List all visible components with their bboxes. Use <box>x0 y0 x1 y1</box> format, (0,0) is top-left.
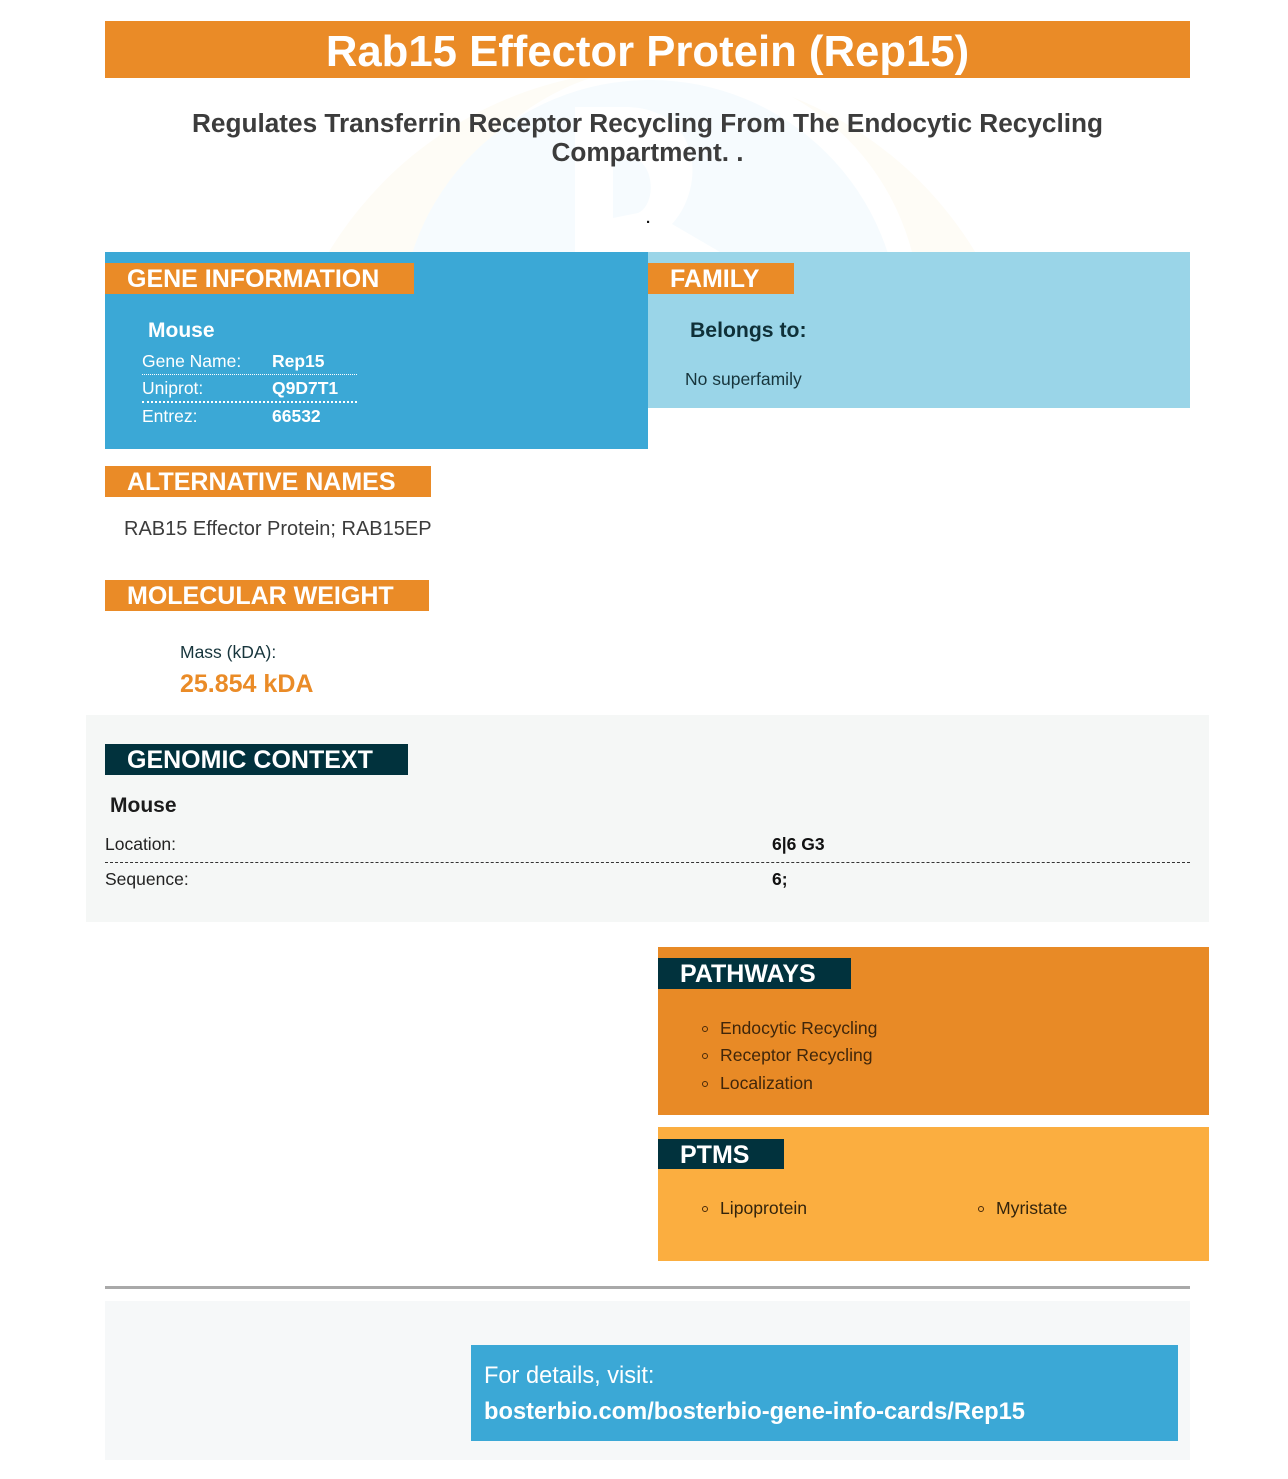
location row: Location: <box>105 834 176 854</box>
ptm item: lipoprotein: Lipoprotein <box>720 1198 807 1218</box>
alternative names text: RAB15 Effector Protein; RAB15EP <box>124 518 432 540</box>
background watermark logo <box>329 78 975 252</box>
heading: molecular weight: MOLECULAR WEIGHT <box>127 582 394 610</box>
pathway item: Endocytic Recycling <box>720 1018 877 1038</box>
mass label: Mass (kDA): <box>180 642 276 662</box>
panel: footer <box>105 1301 1190 1460</box>
sequence row: 6; <box>772 869 788 889</box>
uniprot row: Uniprot: <box>142 378 203 398</box>
sequence row: Sequence: <box>105 869 189 889</box>
pathway item: Localization <box>720 1073 813 1093</box>
panel: pathways <box>658 947 1209 1115</box>
uniprot row <box>142 376 357 403</box>
entrez row <box>142 406 321 426</box>
subtitle <box>192 108 1103 167</box>
location row: 6|6 G3 <box>772 834 825 854</box>
gene name row: Rep15 <box>272 351 325 371</box>
heading: family: FAMILY <box>670 265 759 293</box>
heading: ptms <box>658 1139 784 1169</box>
pathway item: Receptor Recycling <box>720 1045 873 1065</box>
species label: Mouse <box>148 319 215 342</box>
heading: pathways: PATHWAYS <box>680 960 816 988</box>
panel: family <box>648 252 1190 408</box>
subtitle: Regulates Transferrin Receptor Recycling From The Endocytic Recycling <box>192 108 1103 138</box>
belongs to label: Belongs to: <box>690 319 807 342</box>
mass value: 25.854 kDA <box>180 670 313 698</box>
gene name row: Gene Name: <box>142 351 241 371</box>
location row <box>105 831 1190 863</box>
panel: genomic context <box>86 715 1209 922</box>
callout url: bosterbio.com/bosterbio-gene-info-cards/Rep15 <box>484 1399 1025 1425</box>
title banner: Rab15 Effector Protein (Rep15) <box>326 27 969 76</box>
pathway list <box>702 1018 877 1093</box>
heading: ptms: PTMS <box>680 1141 749 1169</box>
gene name row <box>142 349 357 375</box>
family value: No superfamily <box>685 369 802 389</box>
sequence row <box>105 869 788 889</box>
panel: ptms <box>658 1127 1209 1261</box>
small dot text: . <box>646 210 650 227</box>
callout: details link <box>471 1345 1178 1441</box>
heading: family <box>648 263 794 294</box>
panel: gene information <box>105 252 648 449</box>
ptm item: myristate: Myristate <box>996 1198 1067 1218</box>
heading: pathways <box>658 958 851 989</box>
callout label: For details, visit: <box>484 1363 654 1389</box>
title banner <box>105 21 1190 78</box>
entrez row: 66532 <box>272 406 321 426</box>
entrez row: Entrez: <box>142 406 197 426</box>
species label: Mouse <box>110 794 177 817</box>
footer divider <box>105 1286 1190 1289</box>
heading: gene information: GENE INFORMATION <box>127 265 379 293</box>
heading: genomic context: GENOMIC CONTEXT <box>127 746 373 774</box>
uniprot row: Q9D7T1 <box>272 378 338 398</box>
subtitle: Compartment. . <box>551 137 744 167</box>
heading: alternative names: ALTERNATIVE NAMES <box>127 468 396 496</box>
